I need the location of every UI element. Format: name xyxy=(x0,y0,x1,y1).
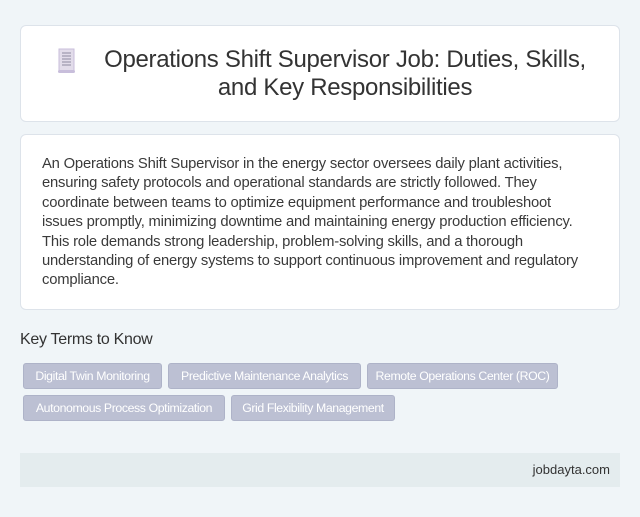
description text: issues promptly, minimizing downtime and maintaining energy production efficiency. xyxy=(42,214,573,230)
title: and Key Responsibilities xyxy=(218,74,472,101)
tag xyxy=(367,363,558,389)
tag: Digital Twin Monitoring xyxy=(35,369,150,383)
tag xyxy=(23,395,225,421)
tag xyxy=(231,395,395,421)
description text: ensuring safety protocols and operational standards are strictly followed. They xyxy=(42,175,537,191)
tag: Autonomous Process Optimization xyxy=(36,401,212,415)
description text xyxy=(42,156,578,288)
description text: understanding of energy systems to support continuous improvement and regulatory xyxy=(42,253,578,269)
title: Operations Shift Supervisor Job: Duties, Skills, xyxy=(104,46,586,73)
description text: An Operations Shift Supervisor in the energy sector oversees daily plant activities, xyxy=(42,156,562,172)
description card xyxy=(20,134,620,310)
tag: Remote Operations Center (ROC) xyxy=(376,369,549,383)
description text: compliance. xyxy=(42,272,119,288)
description text: This role demands strong leadership, problem-solving skills, and a thorough xyxy=(42,234,523,250)
title xyxy=(104,46,586,101)
footer text: jobdayta.com xyxy=(533,462,610,477)
header card xyxy=(20,25,620,122)
tag: Predictive Maintenance Analytics xyxy=(181,369,348,383)
tag xyxy=(168,363,361,389)
tag xyxy=(23,363,162,389)
icon: document xyxy=(58,48,75,73)
key terms heading: Key Terms to Know xyxy=(20,331,152,348)
description text: coordinate between teams to optimize equipment performance and troubleshoot xyxy=(42,195,551,211)
footer xyxy=(20,453,620,487)
tag: Grid Flexibility Management xyxy=(242,401,384,415)
